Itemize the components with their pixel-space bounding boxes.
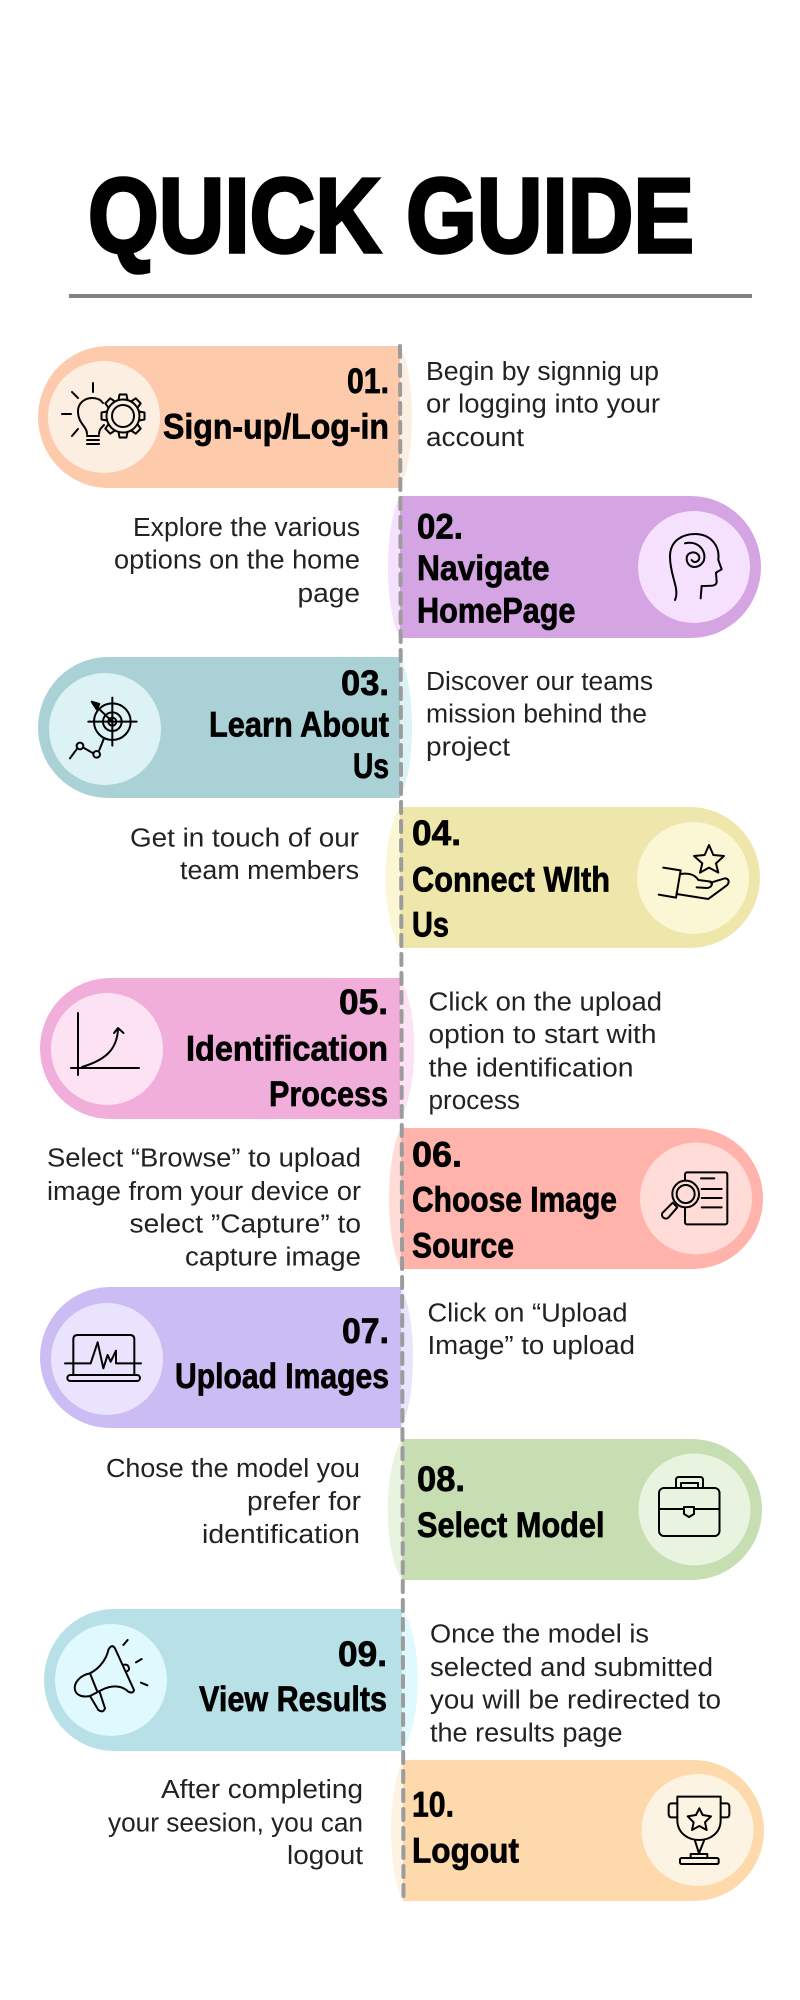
pill (400, 496, 761, 638)
description: Click on the upload (428, 988, 662, 1016)
title: QUICK GUIDE (88, 157, 694, 275)
description: Begin by signnig up (426, 358, 659, 386)
icon circle (49, 673, 161, 785)
pill (38, 657, 400, 798)
description: or logging into your (426, 390, 661, 418)
heading: Sign-up/Log-in (163, 408, 389, 446)
number: 03. (341, 664, 389, 703)
description: process (428, 1087, 520, 1115)
step 01: Sign-up/Log-in (38, 346, 661, 488)
number: 09. (338, 1635, 387, 1674)
heading (412, 860, 610, 944)
description: identification (202, 1521, 360, 1549)
pill (401, 1128, 763, 1269)
icon: hand holding star (659, 845, 729, 899)
icon circle (640, 1142, 752, 1254)
icon circle (51, 1303, 163, 1415)
pill end tint (386, 807, 400, 948)
step 05: Identification Process (40, 978, 662, 1119)
number: 06. (412, 1136, 462, 1174)
icon circle (55, 1624, 167, 1736)
description: the results page (430, 1720, 622, 1748)
pill (403, 1760, 764, 1901)
description: project (426, 734, 510, 762)
icon circle (48, 361, 160, 473)
step 03: Learn About Us (38, 657, 653, 798)
description (428, 1300, 635, 1360)
description: Image” to upload (428, 1332, 635, 1360)
pill (38, 346, 400, 488)
description: logout (287, 1842, 363, 1870)
description: prefer for (247, 1488, 362, 1516)
icon: laptop with pulse (65, 1335, 141, 1381)
number: 01. (347, 362, 389, 401)
heading: Identification (186, 1030, 388, 1068)
pill end tint (388, 496, 400, 638)
heading (417, 549, 576, 630)
icon: briefcase (659, 1477, 720, 1536)
description: Once the model is (430, 1620, 649, 1648)
description: Chose the model you (106, 1455, 360, 1483)
description: account (426, 424, 524, 452)
heading: Select Model (417, 1506, 604, 1545)
number: 07. (342, 1312, 389, 1351)
description: Click on “Upload (428, 1300, 628, 1328)
icon circle (51, 993, 163, 1105)
description (114, 514, 360, 608)
pill end tint (400, 978, 414, 1119)
number: 10. (412, 1786, 454, 1824)
icon circle (637, 822, 749, 934)
description: option to start with (428, 1021, 656, 1049)
description: capture image (185, 1244, 361, 1272)
description: options on the home (114, 546, 360, 574)
step 02: Navigate HomePage (114, 496, 761, 638)
heading (209, 706, 389, 786)
heading: Connect WIth (412, 860, 610, 900)
pill end tint (402, 1609, 418, 1751)
pill (40, 978, 400, 1119)
description: Get in touch of our (130, 824, 360, 852)
step 10: Logout (108, 1760, 764, 1901)
description: team members (180, 857, 359, 885)
number: 04. (412, 814, 461, 853)
description: Discover our teams (426, 668, 653, 696)
heading (186, 1030, 388, 1114)
description: page (298, 580, 360, 608)
number: 08. (417, 1460, 465, 1499)
heading: Navigate (417, 549, 550, 588)
description (428, 988, 662, 1115)
heading: Logout (412, 1832, 519, 1870)
pill end tint (400, 657, 412, 798)
description (47, 1144, 362, 1272)
pill end tint (401, 1287, 413, 1428)
pill end tint (391, 1760, 403, 1901)
description (426, 668, 653, 762)
icon: target with arrow (70, 698, 137, 758)
icon circle (638, 511, 750, 623)
description (106, 1455, 362, 1549)
pill end tint (388, 1439, 402, 1580)
icon circle (642, 1774, 754, 1886)
icon: head with spiral (670, 534, 722, 600)
icon: lightbulb and gear (62, 383, 144, 444)
step 04: Connect WIth Us (130, 807, 760, 948)
heading (412, 1180, 617, 1266)
description: image from your device or (47, 1178, 362, 1206)
pill (400, 807, 760, 948)
heading: Learn About (209, 706, 389, 744)
description (426, 358, 661, 452)
description: After completing (161, 1776, 363, 1804)
heading: HomePage (417, 592, 576, 630)
description: you will be redirected to (430, 1686, 721, 1714)
heading: Us (412, 906, 449, 944)
icon: megaphone (75, 1640, 147, 1711)
heading: Us (353, 747, 389, 786)
step 06: Choose Image Source (47, 1128, 763, 1272)
pill end tint (400, 346, 412, 488)
heading: View Results (199, 1680, 387, 1719)
title underline (69, 294, 752, 298)
description (430, 1620, 721, 1748)
step 09: View Results (44, 1609, 721, 1751)
description: the identification (428, 1054, 634, 1082)
heading: Choose Image (412, 1180, 617, 1220)
description: select ”Capture” to (130, 1210, 361, 1238)
heading: Source (412, 1226, 514, 1266)
number: 05. (339, 983, 388, 1022)
pill end tint (389, 1128, 401, 1269)
icon: document with magnifier (662, 1172, 727, 1224)
pill (402, 1439, 762, 1580)
description: mission behind the (426, 700, 647, 728)
description: Select “Browse” to upload (47, 1144, 361, 1172)
step 07: Upload Images (40, 1287, 635, 1428)
description (108, 1776, 363, 1870)
description: selected and submitted (430, 1654, 713, 1682)
heading: Process (269, 1075, 388, 1114)
description: Explore the various (133, 514, 360, 542)
step 08: Select Model (106, 1439, 762, 1580)
dashed timeline (400, 346, 404, 1902)
icon: growth chart (71, 1013, 139, 1075)
icon circle (638, 1454, 750, 1566)
description: your seesion, you can (108, 1810, 363, 1838)
pill (44, 1609, 402, 1751)
number: 02. (417, 508, 463, 546)
icon: trophy (669, 1797, 729, 1864)
pill (40, 1287, 401, 1428)
heading: Upload Images (175, 1357, 389, 1396)
description (130, 824, 360, 885)
